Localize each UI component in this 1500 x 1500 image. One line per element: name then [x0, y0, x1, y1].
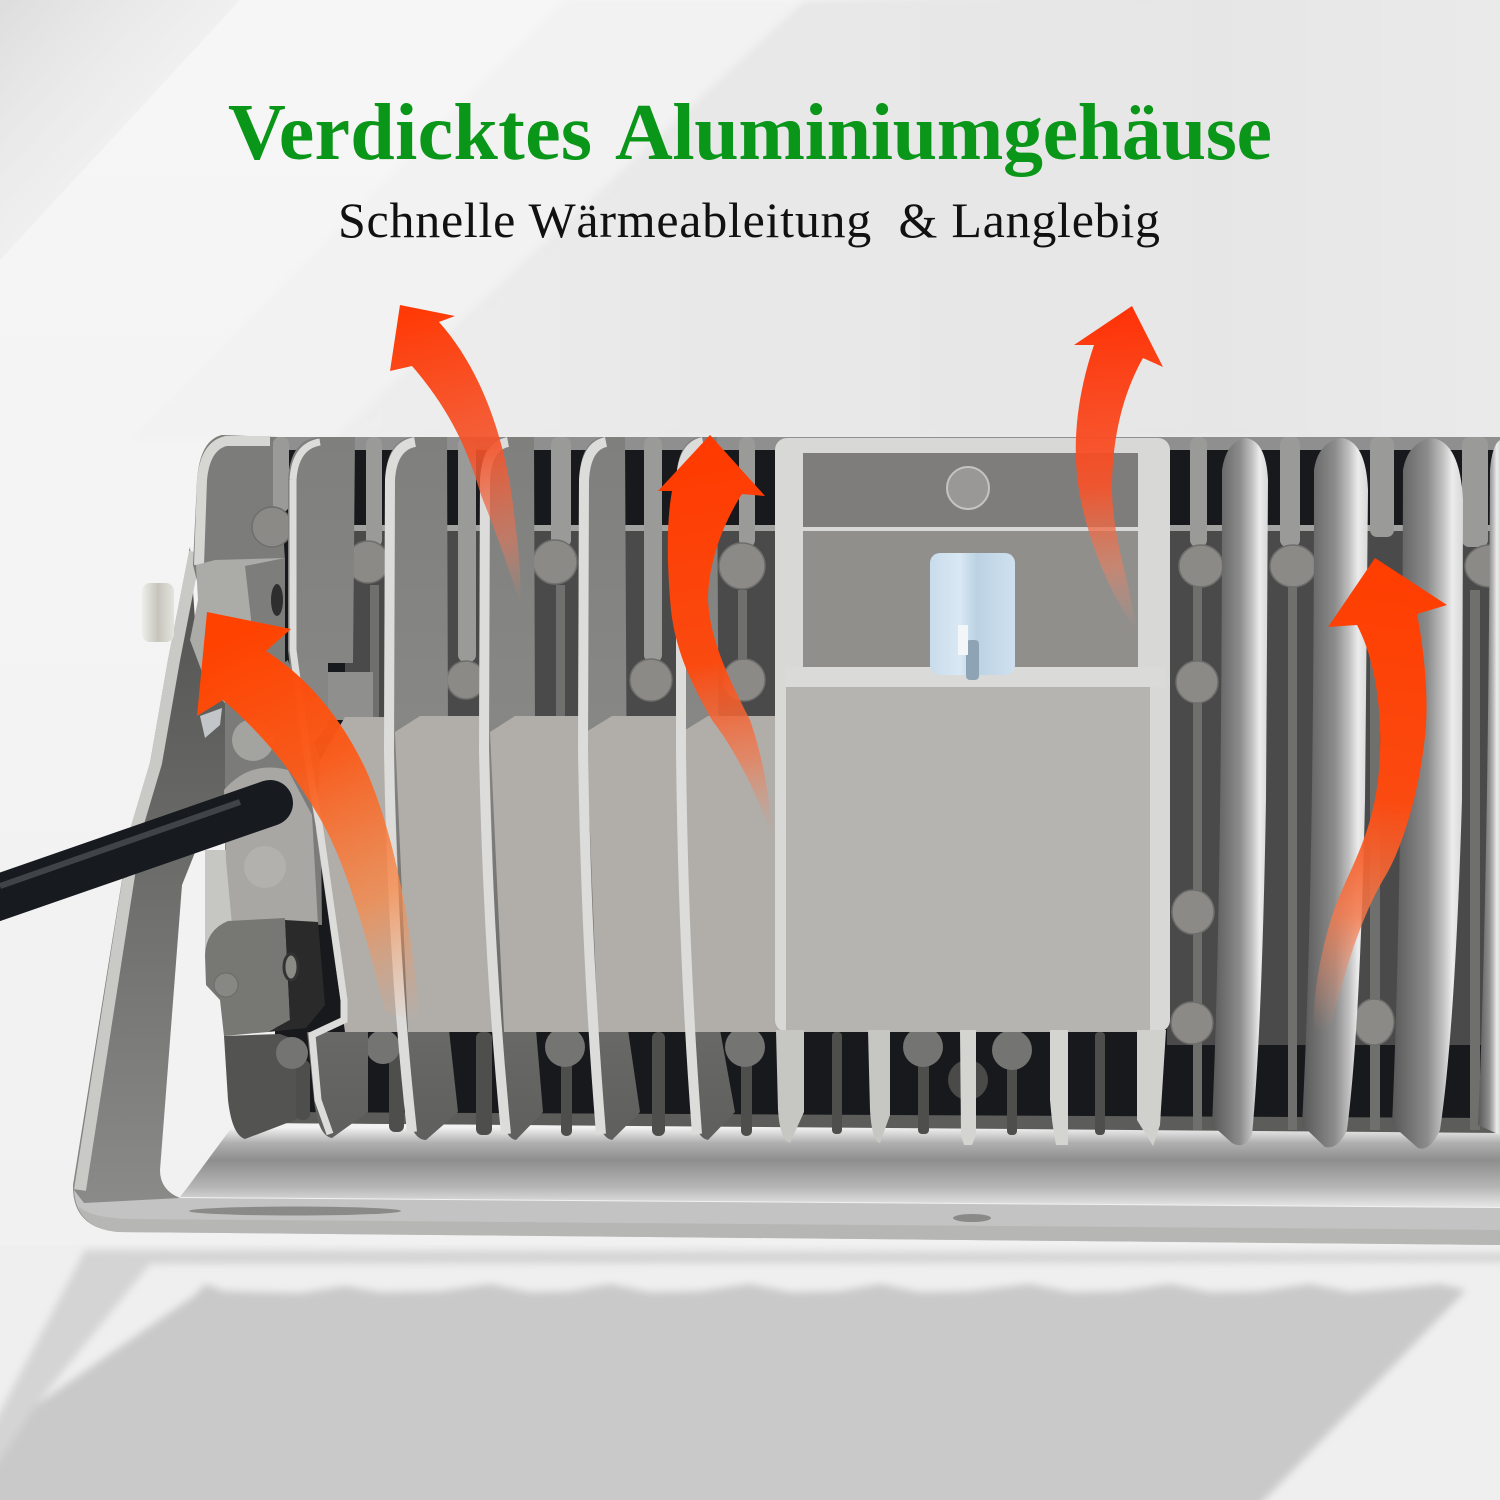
right fin 1 — [1212, 438, 1268, 1145]
bottom stems — [296, 1032, 1105, 1136]
fin 4 body — [578, 437, 640, 1140]
title: Aluminiumgehäuse — [615, 89, 1272, 177]
heat sink panels — [316, 716, 780, 1032]
upper thin fins — [273, 437, 1488, 662]
heat arrow: centre — [658, 435, 772, 835]
gland pin — [244, 846, 286, 888]
mounting hole — [953, 1214, 991, 1222]
fin 2 body — [384, 437, 458, 1140]
panel rib bump — [352, 821, 394, 863]
plate body — [193, 435, 285, 705]
pressure vent valve — [930, 553, 1015, 680]
screw mount block — [205, 918, 290, 1036]
left radiator fin bodies — [288, 437, 735, 1140]
fin 1 upper body — [288, 437, 355, 760]
subtitle: Schnelle Wärmeableitung & Langlebig — [338, 192, 1160, 248]
lug shaded side — [245, 558, 285, 700]
lug hole — [271, 584, 283, 616]
heat arrow: upper left — [390, 305, 521, 605]
bracket base bar — [74, 1190, 1500, 1245]
upper recess — [803, 453, 1138, 528]
bracket arm — [73, 547, 228, 1232]
fin 5 body — [676, 437, 735, 1140]
mid plate — [225, 660, 322, 925]
plate highlight — [199, 441, 270, 565]
top rim — [275, 437, 1500, 450]
ledge — [803, 527, 1138, 531]
fin 3 body — [479, 437, 543, 1140]
lower end plate — [224, 1034, 300, 1139]
right fin 4 — [1478, 440, 1500, 1135]
fin 1 step — [328, 672, 373, 720]
base bar lower edge — [78, 1206, 1500, 1245]
dark cavity — [268, 920, 325, 1032]
right radiator fins — [1212, 438, 1500, 1149]
front plate — [786, 687, 1150, 1032]
bracket lug — [190, 558, 285, 715]
central box — [775, 438, 1170, 1146]
fin 1 lower body — [307, 1032, 368, 1138]
plate top edge — [785, 667, 1165, 687]
right fin 2 — [1302, 438, 1368, 1147]
stamp circle — [214, 973, 238, 997]
heat arrow: left — [197, 612, 420, 1022]
box body — [775, 438, 1170, 1032]
dark housing interior — [275, 445, 1500, 1132]
title: Verdicktes — [228, 89, 592, 177]
pivot bolt — [142, 583, 174, 642]
cable gland — [224, 768, 318, 925]
fin pins — [252, 507, 1500, 1100]
mounting slot — [189, 1206, 401, 1216]
pin disc — [232, 719, 274, 761]
rivet — [947, 467, 989, 509]
lower recess — [803, 531, 1138, 667]
floor reflection shadow — [0, 1250, 1500, 1500]
left end plate — [190, 435, 325, 1139]
right fin 3 — [1392, 438, 1463, 1149]
threaded hole — [284, 954, 298, 980]
inner recessed strips — [345, 525, 1500, 1045]
lower stems — [370, 585, 1480, 1130]
lower rim — [275, 1112, 1500, 1133]
arm edge highlight — [80, 552, 195, 1190]
title — [228, 89, 1272, 177]
thin fins — [273, 437, 1488, 1136]
bottom teeth — [776, 1030, 1166, 1146]
side wall — [205, 850, 233, 955]
inner strip ledge — [345, 525, 1500, 531]
left fin light edges — [293, 442, 703, 1134]
shadow beneath housing — [180, 1127, 1500, 1207]
heat arrow: right — [1314, 558, 1447, 1030]
chipped tabs — [200, 708, 222, 738]
mounting bracket — [73, 547, 1500, 1245]
heat arrow: upper right — [1074, 306, 1163, 632]
cable — [0, 802, 270, 901]
